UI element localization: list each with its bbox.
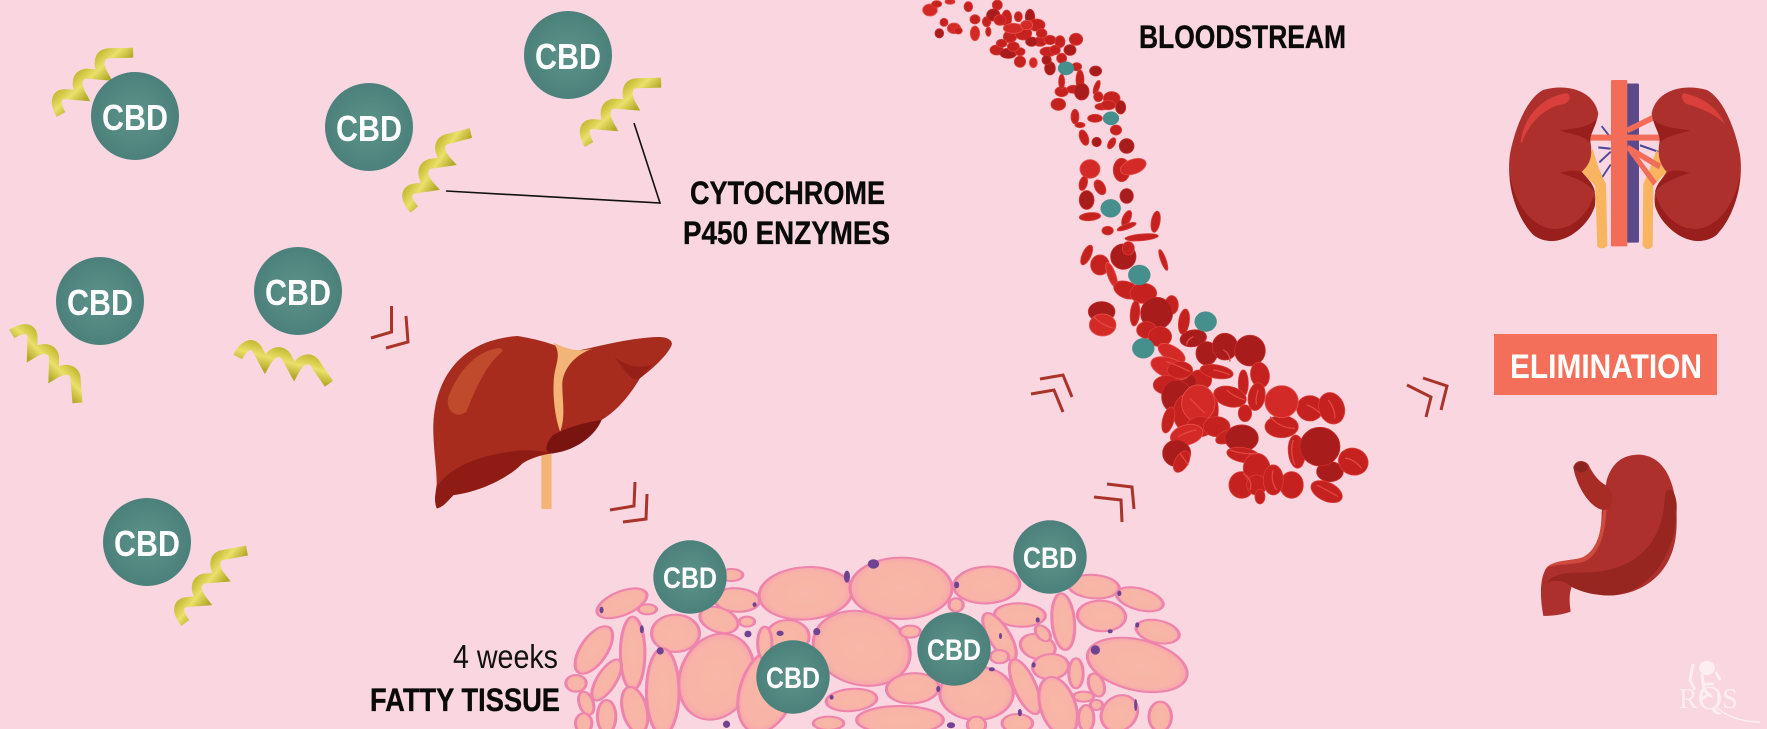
left ureter bbox=[1582, 149, 1607, 248]
arrow: chevrons to liver bbox=[371, 306, 408, 348]
lion bbox=[1690, 661, 1720, 700]
renal vein branches bbox=[1598, 126, 1658, 182]
right kidney bbox=[1652, 88, 1741, 241]
CBD molecule 2 bbox=[325, 83, 413, 171]
label: 4 weeks fatty tissue bbox=[370, 638, 560, 718]
CBD molecule 4 bbox=[56, 257, 144, 345]
vein bbox=[1627, 83, 1639, 243]
arrow: chevrons fat to blood left bbox=[1031, 375, 1072, 412]
enzyme helix 5 bbox=[237, 343, 334, 384]
aorta bbox=[1611, 80, 1627, 246]
Q tail bbox=[1715, 706, 1760, 722]
elimination badge: ELIMINATION bbox=[1510, 348, 1702, 386]
CBD molecule 6: CBD bbox=[114, 523, 180, 564]
icon: liver bbox=[433, 336, 672, 509]
CBD particles in blood bbox=[1058, 62, 1217, 358]
label: cytochrome P450 enzymes: P450 ENZYMES bbox=[683, 215, 890, 251]
arrow: chevrons fat to blood right bbox=[1094, 484, 1134, 522]
enzyme helix 2 bbox=[402, 122, 471, 212]
CBD molecule in fat 1 bbox=[653, 540, 727, 614]
renal arteries bbox=[1587, 118, 1660, 184]
monogram: S bbox=[1722, 684, 1738, 715]
CBD molecule in fat 2 bbox=[756, 640, 830, 714]
enzyme helix 3 bbox=[579, 69, 661, 147]
label: cytochrome P450 enzymes bbox=[683, 175, 890, 251]
CBD molecule in fat 4: CBD bbox=[1023, 542, 1077, 575]
CBD molecule 1 bbox=[91, 72, 179, 160]
arrow: chevrons liver to fat bbox=[610, 482, 647, 522]
icon: kidneys bbox=[1509, 80, 1741, 249]
CBD molecule in fat 1: CBD bbox=[663, 562, 717, 595]
label: cytochrome P450 enzymes: CYTOCHROME bbox=[690, 175, 885, 211]
CBD molecule 5: CBD bbox=[265, 272, 331, 313]
CBD molecule 2: CBD bbox=[336, 108, 402, 149]
CBD molecule 3 bbox=[524, 11, 612, 99]
enzyme helix 1 bbox=[51, 39, 133, 117]
bloodstream cells bbox=[923, 0, 1372, 507]
fatty tissue bbox=[566, 558, 1202, 729]
right ureter bbox=[1643, 150, 1667, 249]
CBD molecule 4: CBD bbox=[67, 282, 133, 323]
CBD molecule in fat 3 bbox=[917, 612, 991, 686]
left kidney bbox=[1509, 88, 1598, 241]
label: bloodstream: BLOODSTREAM bbox=[1139, 19, 1346, 55]
monogram: R bbox=[1679, 684, 1698, 715]
icon: stomach bbox=[1541, 455, 1677, 616]
label: 4 weeks fatty tissue: FATTY TISSUE bbox=[370, 682, 560, 718]
enzyme helix 6 bbox=[174, 539, 247, 625]
monogram: Q bbox=[1698, 680, 1722, 717]
logo bbox=[1679, 661, 1760, 722]
arrow: chevrons to elimination bbox=[1407, 378, 1447, 417]
CBD molecule 5 bbox=[254, 247, 342, 335]
label: 4 weeks fatty tissue: 4 weeks bbox=[453, 638, 558, 675]
enzyme helix 4 bbox=[9, 323, 91, 403]
elimination badge bbox=[1494, 334, 1717, 395]
pointer lines to enzymes bbox=[446, 123, 660, 203]
CBD molecule 1: CBD bbox=[102, 97, 168, 138]
CBD molecule 6 bbox=[103, 498, 191, 586]
CBD molecule in fat 4 bbox=[1013, 520, 1087, 594]
CBD molecule in fat 3: CBD bbox=[927, 634, 981, 667]
CBD molecule in fat 2: CBD bbox=[766, 662, 820, 695]
CBD molecule 3: CBD bbox=[535, 36, 601, 77]
